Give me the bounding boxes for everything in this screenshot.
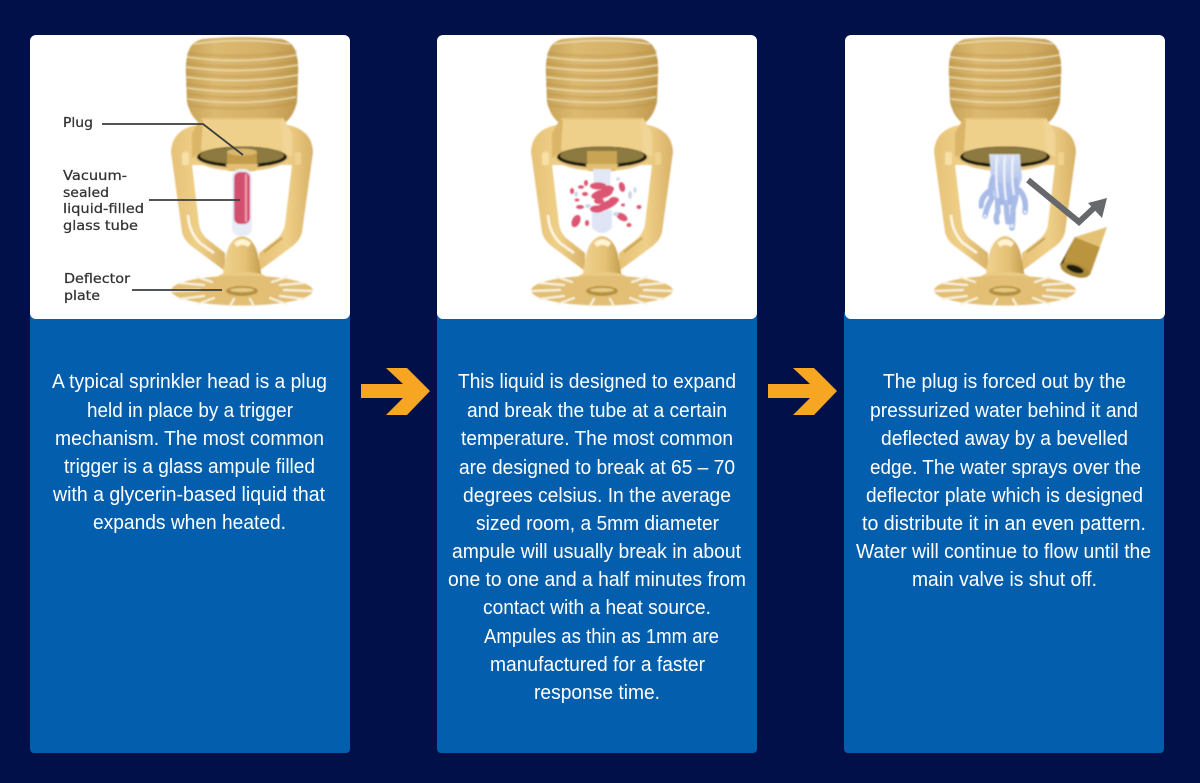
label: glass tube: liquid-filled <box>63 202 144 217</box>
icon: sprinkler head releasing water <box>934 37 1107 306</box>
arrow: plug direction <box>1028 180 1107 222</box>
label: deflector plate: plate <box>64 289 100 304</box>
label: plug <box>63 116 243 155</box>
icon: sprinkler head with broken tube <box>531 37 673 306</box>
arrow: step 1 to step 2 <box>361 368 430 415</box>
text block: step 2 <box>448 371 746 704</box>
label: glass tube <box>63 169 240 234</box>
arrow: step 2 to step 3 <box>768 368 837 415</box>
label: deflector plate: Deflector <box>64 272 131 287</box>
text block: step 3: edge. The water sprays over the <box>870 457 1141 479</box>
label: deflector plate <box>64 272 222 304</box>
text block: step 1: mechanism. The most common <box>55 428 324 450</box>
panel: step 2 <box>437 35 757 753</box>
text block: step 3: pressurized water behind it and <box>870 400 1138 422</box>
icon: glass shards <box>570 180 642 229</box>
text block: step 3: to distribute it in an even pattern. <box>862 513 1146 535</box>
text block: step 2: temperature. The most common <box>461 428 733 450</box>
label: plug: Plug <box>63 116 93 131</box>
panel: step 3 <box>844 35 1165 753</box>
panel: step 1 <box>30 35 350 753</box>
text block: step 2: ampule will usually break in about <box>452 541 741 563</box>
text block: step 3 <box>856 371 1151 591</box>
text block: step 1 <box>52 371 327 534</box>
label: glass tube: sealed <box>63 186 109 201</box>
text block: step 2: contact with a heat source. <box>483 597 711 619</box>
text block: step 2: Ampules as thin as 1mm are <box>484 626 719 648</box>
label: glass tube: Vacuum- <box>63 169 127 184</box>
icon: glass tube <box>232 169 252 236</box>
text block: step 1: trigger is a glass ampule filled <box>64 456 315 478</box>
label: glass tube: glass tube <box>63 219 138 234</box>
icon: tube remains <box>592 169 612 233</box>
icon: ejected plug <box>1059 227 1107 281</box>
text block: step 3: deflector plate which is designed <box>866 485 1143 507</box>
text block: step 3: main valve is shut off. <box>912 569 1097 591</box>
text block: step 2: manufactured for a faster <box>490 654 705 676</box>
text block: step 1: with a glycerin-based liquid that <box>52 484 325 506</box>
icon: sprinkler head with labelled parts <box>63 37 313 306</box>
text block: step 1: held in place by a trigger <box>87 400 293 422</box>
text block: step 1: expands when heated. <box>93 512 286 534</box>
text block: step 2: one to one and a half minutes from <box>448 569 746 591</box>
text block: step 2: response time. <box>534 682 660 704</box>
text block: step 3: Water will continue to flow until the <box>856 541 1151 563</box>
text block: step 1: A typical sprinkler head is a plug <box>52 371 327 393</box>
icon: plug <box>225 148 259 171</box>
text block: step 3: The plug is forced out by the <box>883 371 1126 393</box>
text block: step 2: sized room, a 5mm diameter <box>476 513 719 535</box>
text block: step 2: are designed to break at 65 – 70 <box>459 457 735 479</box>
icon: water spray <box>981 154 1027 228</box>
text block: step 2: This liquid is designed to expand <box>458 371 736 393</box>
text block: step 2: and break the tube at a certain <box>467 400 727 422</box>
text block: step 3: deflected away by a bevelled <box>881 428 1128 450</box>
text block: step 2: degrees celsius. In the average <box>463 485 731 507</box>
